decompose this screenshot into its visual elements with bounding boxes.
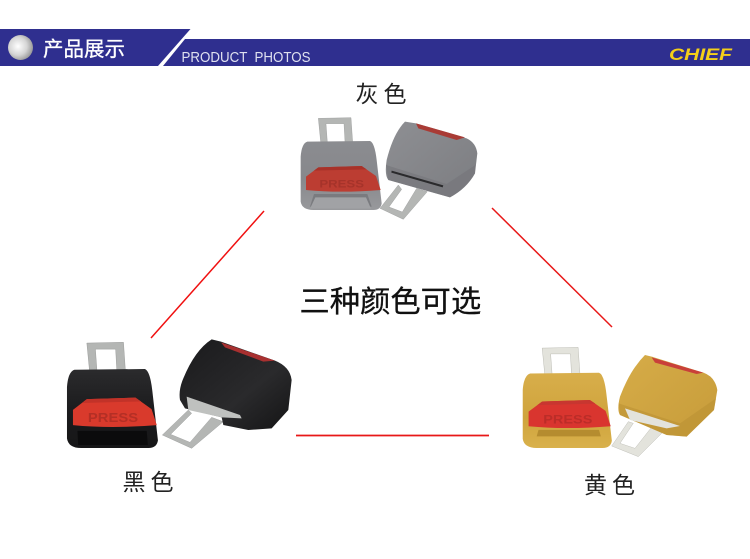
connector line: grey to black: [151, 211, 264, 338]
section title: 产品展示: [43, 38, 125, 61]
logo: CHIEF: CHIEF: [669, 46, 733, 64]
label: black: 黑色: [122, 469, 178, 495]
product: black front unit: [67, 342, 158, 448]
connector line: grey to yellow: [492, 208, 612, 327]
label: yellow: 黄色: [584, 472, 640, 498]
connector line: black to yellow: [296, 434, 489, 436]
label: grey: 灰色: [356, 81, 412, 107]
icon: metallic circle: [8, 35, 33, 60]
product: grey front unit: [301, 118, 382, 210]
product: black side unit: [162, 339, 292, 448]
press lettering: PRESS: [319, 178, 365, 190]
press lettering: PRESS: [543, 412, 592, 426]
center heading: 三种颜色可选: [300, 285, 481, 319]
product: grey side unit: [380, 122, 477, 219]
product: yellow front unit: [523, 347, 612, 448]
product: yellow side unit: [612, 355, 717, 457]
section subtitle: PRODUCT PHOTOS: [182, 50, 310, 66]
header banner: [0, 29, 750, 66]
press lettering: PRESS: [88, 410, 139, 425]
